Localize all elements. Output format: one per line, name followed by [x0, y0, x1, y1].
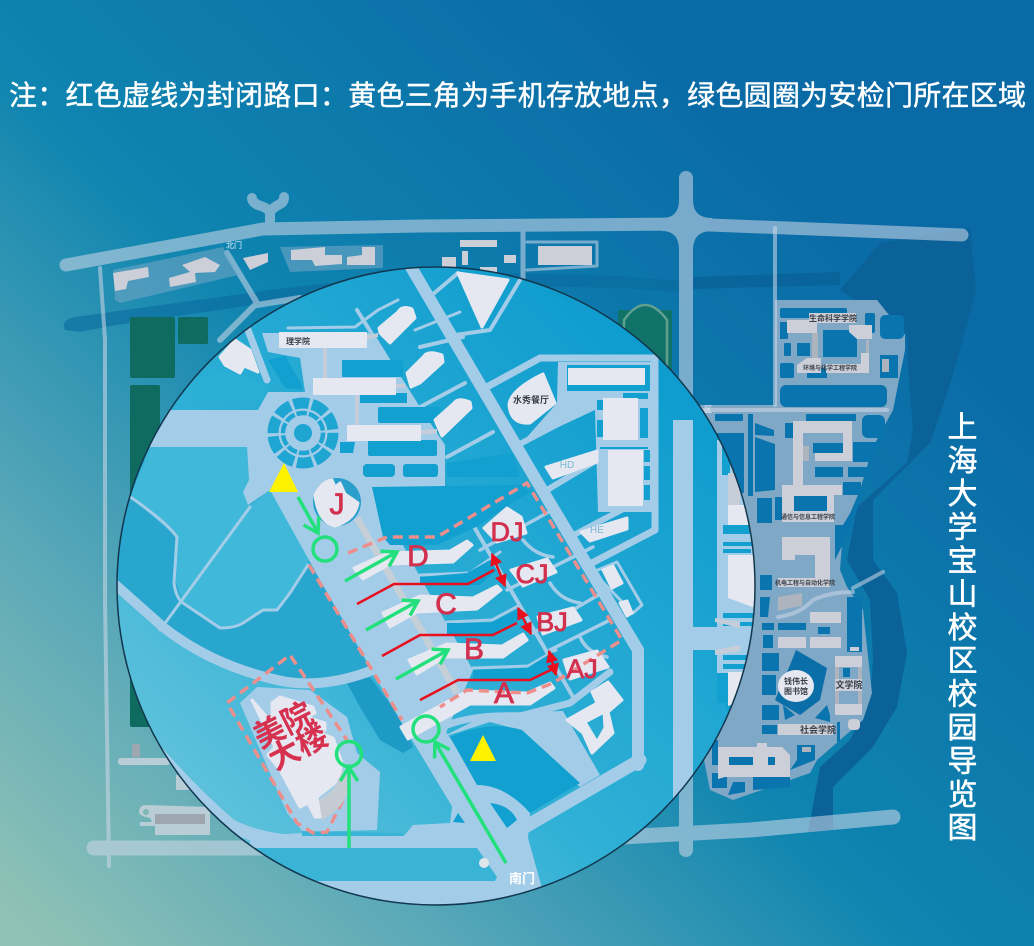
red route lines — [357, 570, 557, 700]
upper white buildings — [220, 273, 758, 706]
north small roads — [244, 298, 462, 406]
gray walkway — [357, 518, 457, 693]
inner labels: HE — [590, 525, 604, 536]
circle base — [118, 268, 729, 886]
east campus labels: 钱伟长 — [784, 676, 808, 686]
east campus labels — [704, 313, 863, 735]
east campus labels: 社会学院 — [800, 724, 836, 735]
vertical campus title: 上海大学宝山校区校园导览图 — [942, 411, 978, 845]
south road areas — [228, 687, 548, 910]
magnified circle map — [110, 260, 770, 910]
river — [64, 228, 976, 832]
circle border — [117, 267, 755, 905]
art building 美院大楼: 美院 — [248, 696, 319, 755]
north-west buildings — [113, 240, 592, 303]
building letters: BJ — [536, 607, 568, 637]
east campus roads — [700, 228, 887, 617]
teaching buildings A to D with annexes — [354, 508, 622, 753]
inner labels: 理学院 — [286, 336, 310, 346]
building letters: AJ — [566, 654, 598, 684]
north plaza and band — [125, 333, 473, 742]
ring plaza icon — [273, 403, 333, 463]
east campus labels: 环境与化学工程学院 — [803, 364, 857, 372]
building letters: A — [494, 677, 514, 710]
title note: 注：红色虚线为封闭路口：黄色三角为手机存放地点，绿色圆圈为安检门所在区域 — [9, 80, 1026, 111]
yellow triangles: phone storage — [269, 463, 496, 761]
east campus labels: 机电工程与自动化学院 — [775, 579, 835, 587]
east campus ground — [700, 300, 905, 800]
lakes — [118, 447, 413, 753]
inner labels: HD — [560, 460, 574, 471]
sports track — [618, 305, 672, 370]
building letters: B — [464, 633, 484, 666]
east campus labels: 通信与信息工程学院 — [781, 513, 835, 521]
green security gate circles — [313, 537, 439, 766]
building letters: CJ — [516, 559, 548, 589]
label: north gate: 北门 — [226, 240, 242, 250]
outer campus map — [64, 178, 976, 866]
lake paths — [118, 496, 404, 840]
south-west facilities — [118, 744, 210, 835]
east campus labels: 区 — [704, 405, 712, 414]
east campus labels: 图书馆 — [784, 686, 808, 696]
blue blocks — [268, 356, 766, 710]
east campus buildings — [718, 313, 872, 779]
building letters: DJ — [490, 517, 524, 547]
green fields — [130, 317, 208, 727]
east campus connectors — [778, 333, 889, 752]
east campus blocks — [712, 308, 904, 795]
red double arrows — [492, 554, 556, 675]
green route arrows — [298, 497, 506, 863]
inner labels — [286, 336, 604, 536]
yellow triangle block — [440, 711, 600, 787]
building letters: C — [435, 588, 457, 621]
south gate — [479, 858, 535, 886]
south gate: 南门 — [509, 871, 535, 886]
art building 美院大楼: 大楼 — [263, 718, 334, 777]
closed-road dashed lines — [227, 483, 622, 833]
east roads — [405, 268, 754, 832]
J building: J — [330, 488, 344, 521]
east campus labels: 生命科学学院 — [809, 313, 857, 323]
J building — [313, 478, 361, 526]
inner labels: 水秀餐厅 — [513, 394, 549, 405]
building letters: D — [407, 540, 429, 573]
east campus labels: 文学院 — [835, 679, 863, 690]
art building 美院大楼 — [248, 696, 352, 820]
main roads — [66, 178, 962, 866]
building letters — [407, 517, 598, 710]
